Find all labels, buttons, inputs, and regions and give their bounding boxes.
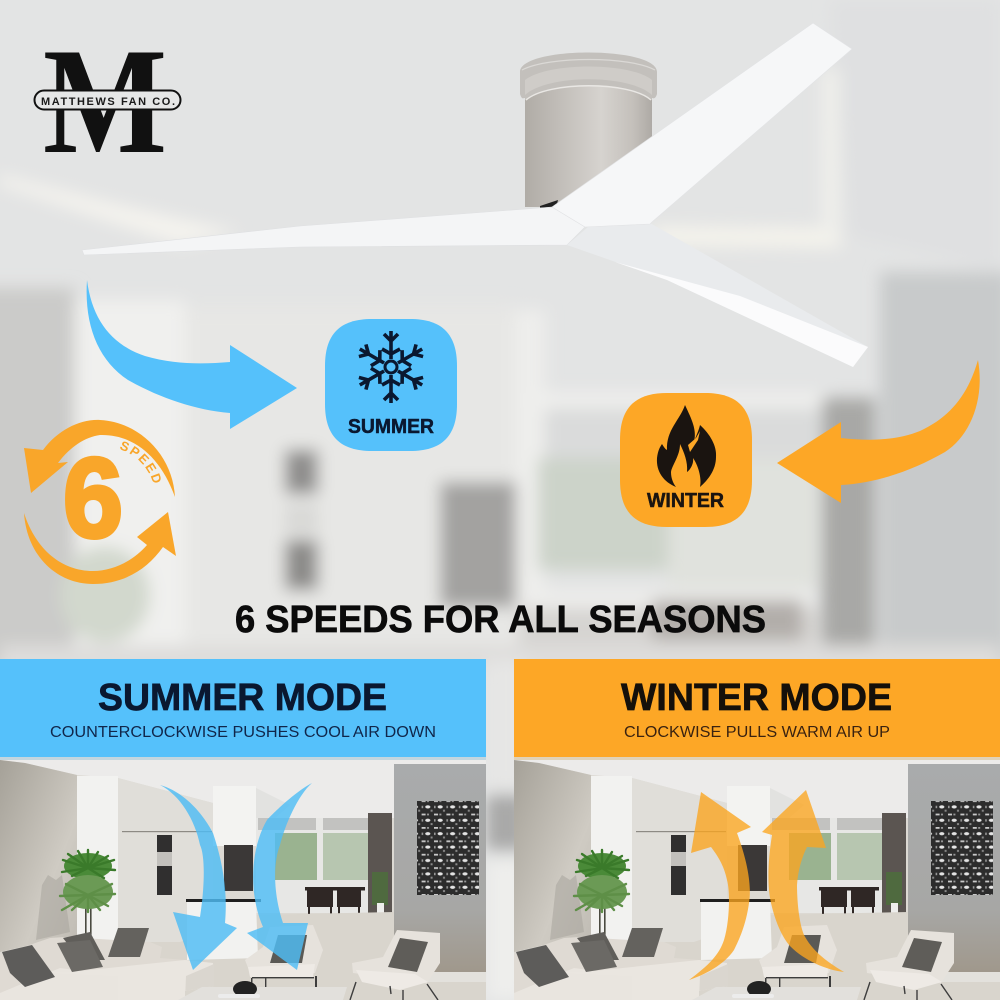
6 speed icon — [24, 420, 176, 584]
6 speed icon: SPEED — [120, 442, 161, 483]
arrows: warm air up — [689, 790, 844, 980]
summer airflow arrow — [87, 280, 297, 429]
blade lower right — [567, 223, 868, 367]
summer icon — [325, 319, 457, 451]
6 speed icon: 6 — [63, 435, 123, 561]
winter heading: WINTER MODE — [621, 677, 892, 719]
winter airflow arrow — [777, 360, 980, 503]
blade left — [82, 207, 585, 255]
arrows: cool air down — [160, 783, 312, 970]
winter icon — [620, 393, 752, 527]
fan motor housing — [520, 52, 657, 208]
summer room photo — [0, 760, 486, 1000]
top rotating arrow — [24, 420, 175, 497]
panel: summer mode — [0, 659, 486, 1000]
logo: M — [43, 17, 167, 185]
icon: snowflake — [355, 331, 427, 403]
summer icon: SUMMER — [348, 416, 435, 438]
summer heading: SUMMER MODE — [98, 677, 387, 719]
icon: flame — [657, 405, 716, 487]
winter icon: WINTER — [647, 490, 725, 512]
blade upper right — [552, 23, 852, 227]
summer description: COUNTERCLOCKWISE PUSHES COOL AIR DOWN — [50, 724, 436, 741]
speed label — [119, 449, 154, 486]
main heading: 6 SPEEDS FOR ALL SEASONS — [235, 599, 766, 641]
winter description: CLOCKWISE PULLS WARM AIR UP — [624, 724, 890, 741]
logo: MATTHEWS FAN CO. — [41, 96, 175, 108]
ceiling fan — [82, 23, 868, 367]
bottom rotating arrow — [24, 512, 176, 584]
panel: winter mode — [514, 659, 1000, 1000]
winter room photo — [514, 760, 1000, 1000]
